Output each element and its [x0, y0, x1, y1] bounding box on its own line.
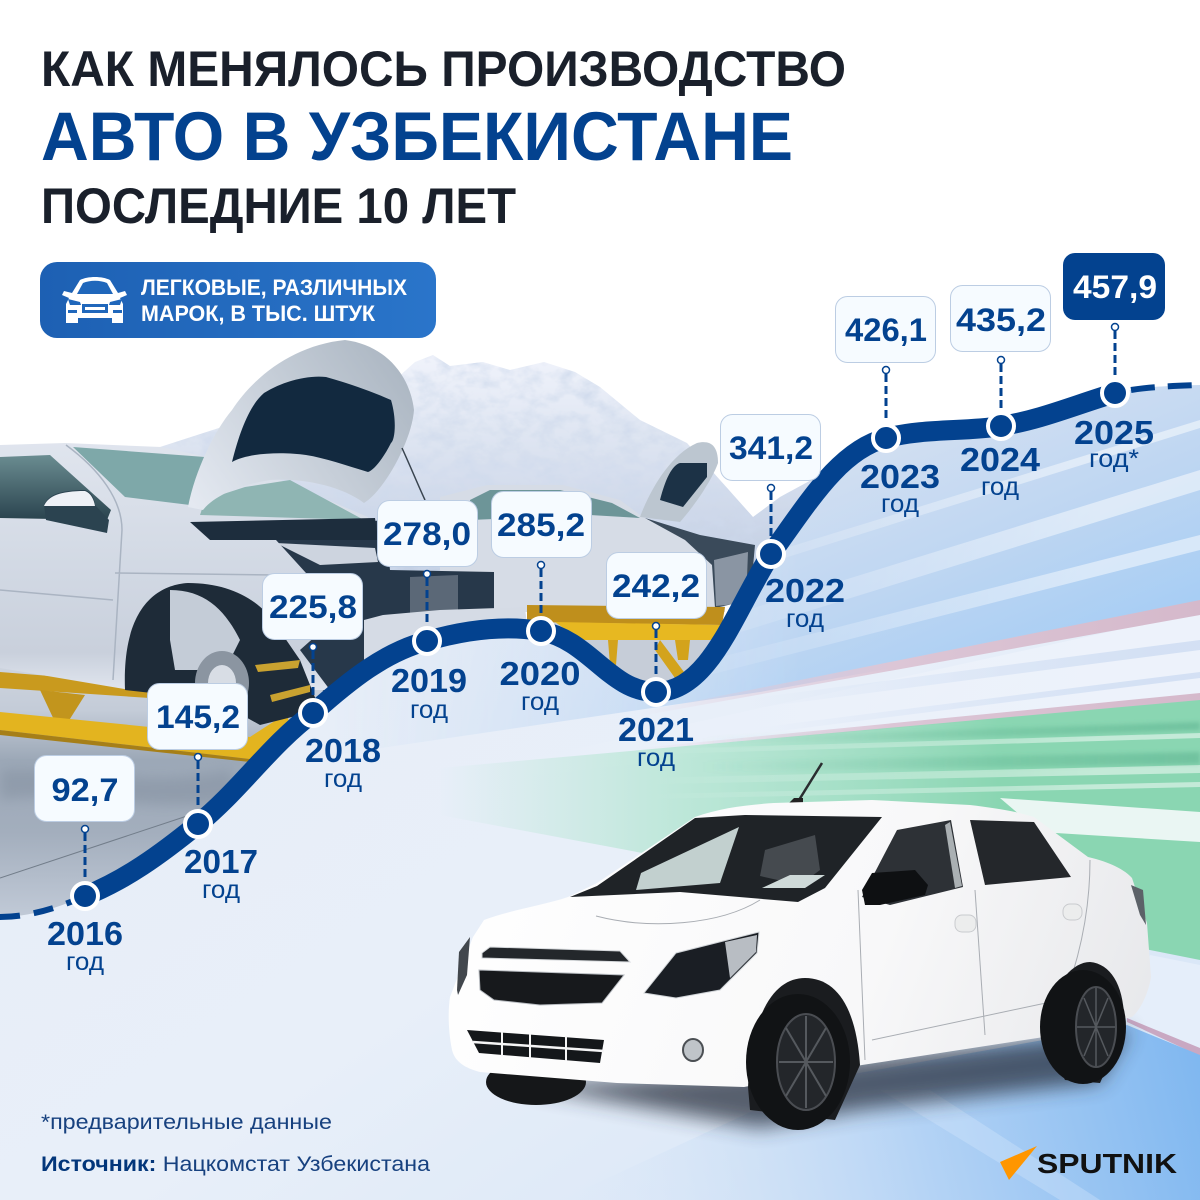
year 2019: год	[410, 696, 448, 724]
year 2020: 2020	[500, 655, 580, 692]
year 2022	[765, 572, 845, 633]
fog lamp	[683, 1039, 703, 1061]
year 2021: 2021	[618, 711, 694, 748]
year 2016: год	[66, 948, 104, 976]
value 2023: 426,1	[845, 312, 927, 348]
year 2017: 2017	[184, 843, 258, 880]
legend text: МАРОК, В ТЫС. ШТУК	[141, 301, 376, 326]
front door window	[862, 820, 963, 905]
photo: second car on assembly line	[440, 442, 770, 690]
value 2023	[836, 296, 936, 362]
main grille	[479, 970, 624, 1005]
year 2024	[960, 441, 1041, 501]
value 2025	[1063, 253, 1165, 320]
door lines	[596, 860, 1090, 1060]
value 2025: 457,9	[1073, 269, 1157, 305]
open hood	[188, 340, 414, 510]
mountains backdrop	[160, 355, 815, 600]
line chart: production curve	[0, 385, 1200, 917]
door lines	[0, 445, 276, 680]
year 2019: 2019	[391, 662, 467, 699]
data connectors and points	[72, 324, 1128, 909]
value 2022: 341,2	[729, 430, 813, 466]
value 2020	[492, 492, 592, 558]
year 2020	[500, 655, 580, 716]
title	[41, 41, 846, 234]
year 2016: 2016	[47, 915, 123, 952]
legend text: ЛЕГКОВЫЕ, РАЗЛИЧНЫХ	[141, 275, 407, 300]
year 2021: год	[637, 744, 675, 772]
icon: orange wedge	[1000, 1146, 1037, 1180]
green wedge	[440, 700, 1200, 960]
antenna	[799, 763, 822, 800]
windshield	[570, 815, 882, 902]
value 2024: 435,2	[956, 302, 1046, 338]
mirror	[44, 490, 109, 533]
side window	[0, 455, 111, 520]
year 2023: год	[881, 490, 919, 518]
left edge light	[457, 937, 470, 995]
headlight	[644, 932, 759, 998]
blue upper wedge	[436, 385, 1200, 740]
year labels	[47, 414, 1154, 976]
ground shadow	[520, 1030, 1130, 1128]
logo wordmark: SPUTNIK	[1037, 1148, 1177, 1179]
legend pill	[40, 262, 436, 338]
value 2016: 92,7	[52, 772, 118, 808]
lower grille	[467, 1030, 604, 1063]
year 2023	[860, 458, 940, 518]
mirror	[862, 870, 928, 905]
value 2019: 278,0	[383, 516, 471, 552]
car body	[0, 443, 372, 690]
year 2025: год*	[1089, 445, 1139, 473]
value 2021: 242,2	[612, 568, 700, 604]
year 2022: год	[786, 605, 824, 633]
windshield	[73, 447, 205, 505]
body	[449, 800, 1151, 1087]
year 2020: год	[521, 688, 559, 716]
lower blue wedge	[1127, 955, 1200, 1050]
photo: factory floor	[0, 640, 440, 960]
photo: white sedan	[449, 763, 1151, 1130]
value 2024	[950, 286, 1050, 352]
year 2019	[391, 662, 467, 724]
value 2018: 225,8	[269, 589, 357, 625]
pink streaks	[694, 600, 1200, 706]
year 2023: 2023	[860, 458, 940, 495]
year 2017: год	[202, 876, 240, 904]
value 2018	[262, 574, 362, 640]
year 2022: 2022	[765, 572, 845, 609]
background streak panel under the curve	[0, 380, 1200, 1200]
year 2017	[184, 843, 258, 904]
upper grille	[482, 947, 630, 962]
yellow rails	[0, 672, 300, 762]
year 2024: 2024	[960, 441, 1041, 478]
legend text	[141, 275, 407, 326]
rear door window	[970, 820, 1071, 885]
year 2024: год	[981, 473, 1019, 501]
value 2016	[34, 756, 134, 822]
value 2020: 285,2	[497, 507, 585, 543]
year 2016	[47, 915, 123, 976]
footnote: *предварительные данные	[41, 1111, 332, 1134]
door handles	[955, 915, 976, 932]
white band on green	[1000, 798, 1200, 842]
value 2019	[378, 500, 478, 566]
icon: car front	[62, 277, 127, 323]
light band	[1040, 616, 1200, 708]
year 2018	[305, 732, 381, 793]
title line 3: ПОСЛЕДНИЕ 10 ЛЕТ	[41, 178, 516, 234]
year 2025	[1074, 414, 1154, 473]
wheel arch	[125, 583, 320, 725]
front left tire	[486, 1059, 586, 1105]
engine and front end	[270, 520, 494, 700]
year 2018: 2018	[305, 732, 381, 769]
value 2017: 145,2	[156, 699, 240, 735]
title line 2: АВТО В УЗБЕКИСТАНЕ	[41, 98, 793, 175]
tail light	[1131, 885, 1146, 925]
source: Источник: Нацкомстат Узбекистана	[41, 1153, 430, 1176]
value boxes	[34, 253, 1165, 822]
value 2021	[606, 552, 706, 618]
value 2017	[148, 684, 248, 750]
photo: main car with open hood	[0, 340, 527, 762]
title line 1: КАК МЕНЯЛОСЬ ПРОИЗВОДСТВО	[41, 41, 846, 97]
value 2022	[720, 414, 820, 480]
logo: Sputnik	[1000, 1146, 1177, 1180]
year 2025: 2025	[1074, 414, 1154, 451]
year 2018: год	[324, 765, 362, 793]
wheel arches and wheels	[748, 978, 860, 1120]
year 2021	[618, 711, 694, 772]
